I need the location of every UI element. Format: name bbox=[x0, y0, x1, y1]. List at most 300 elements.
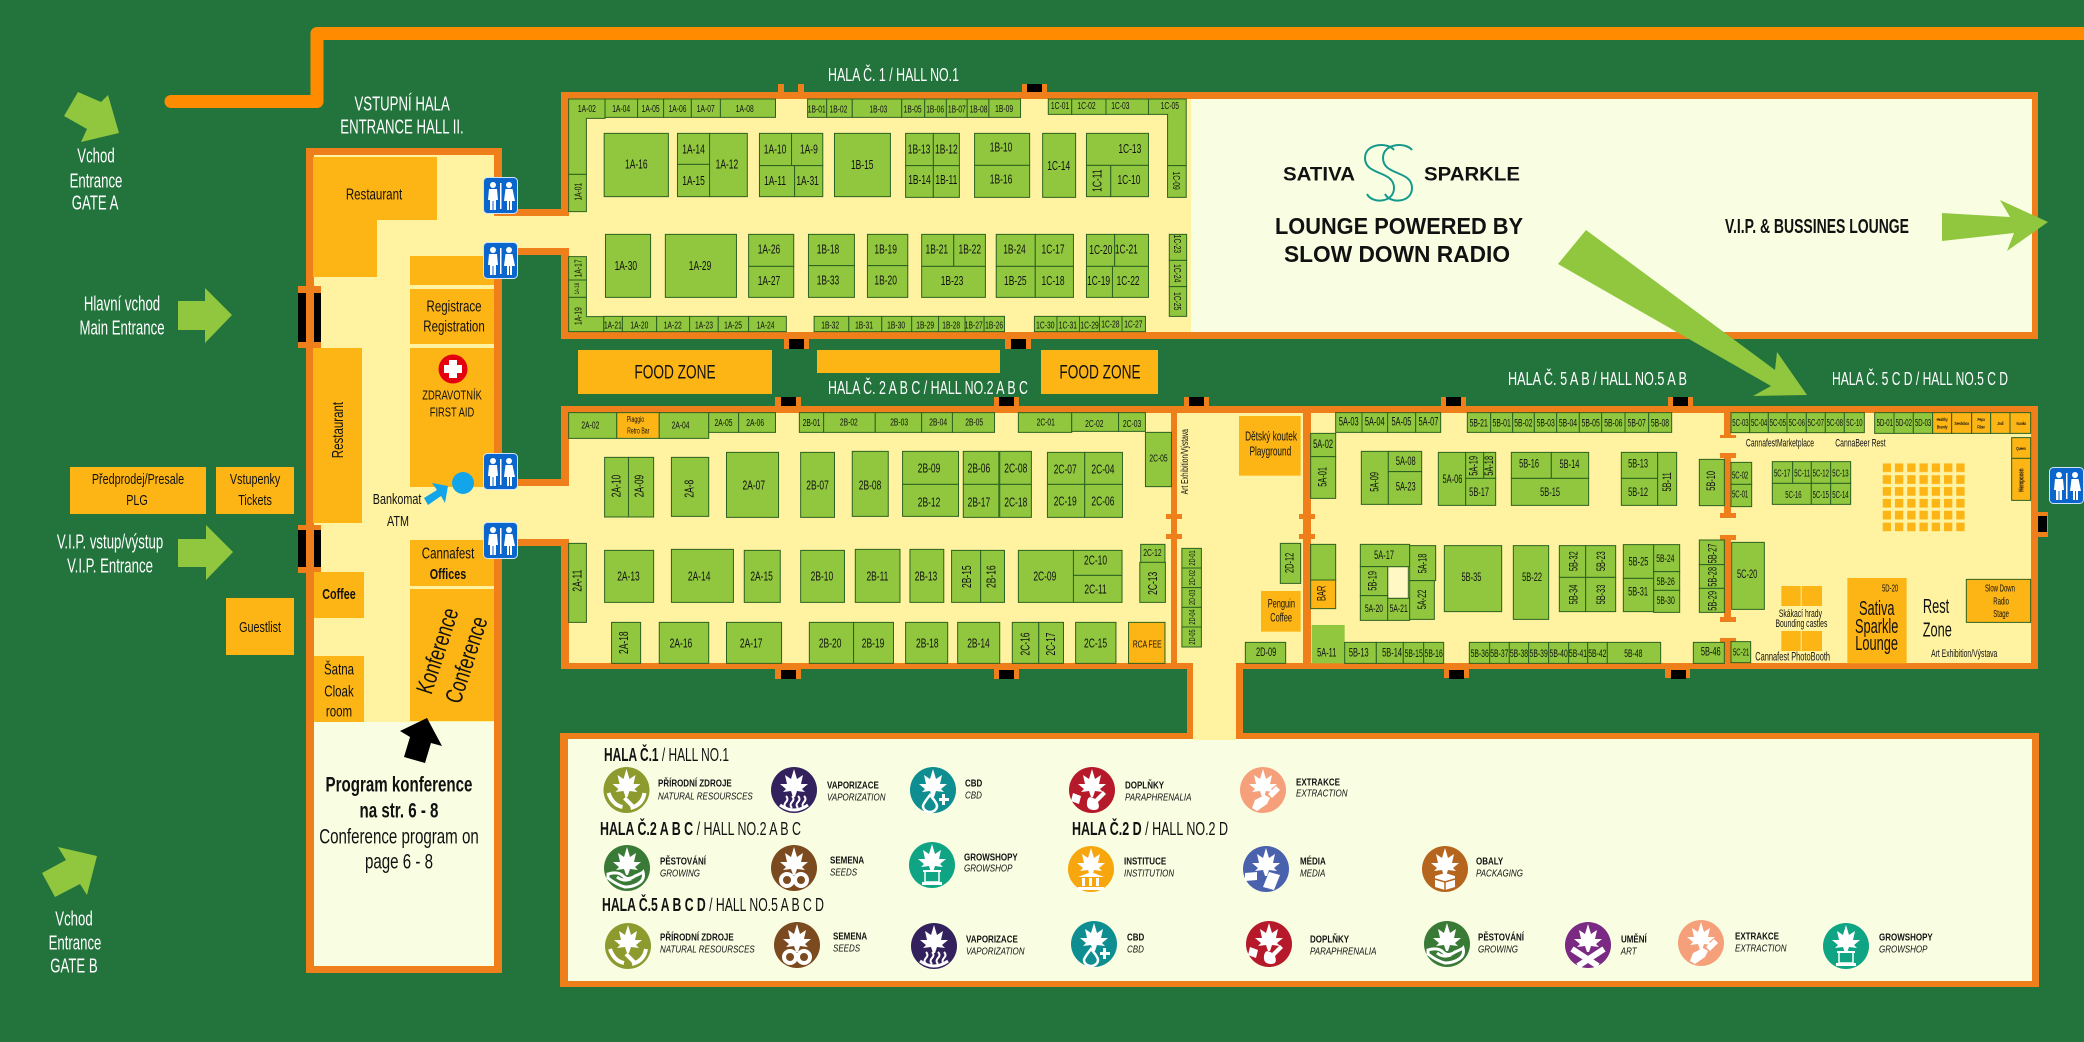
ATM: Bankomat bbox=[373, 490, 422, 508]
legend item: media bbox=[1243, 846, 1326, 892]
bounding castles and photobooth: Skákací hrady bbox=[1779, 607, 1822, 619]
hall 5 bottom row: 5A-11 bbox=[1317, 647, 1337, 660]
heading: hall 2: HALA Č. 2 A B C / HALL NO.2 A B C bbox=[828, 377, 1028, 398]
tickets box bbox=[216, 467, 294, 514]
hall 5 row 1: 5A-06 bbox=[1443, 473, 1463, 487]
hall 2 row 1: 2C-07 bbox=[1054, 463, 1077, 477]
hall 5 C D stalls bbox=[1693, 413, 2031, 664]
hall 1 top row C: 1C-09 bbox=[1170, 171, 1182, 190]
hall 5 row 1: 5A-19 bbox=[1468, 456, 1481, 476]
legend item: paraphrenalia: PARAPHRENALIA bbox=[1125, 791, 1191, 803]
legend item: extraction hall 5: EXTRAKCE bbox=[1735, 930, 1779, 942]
legend item: paraphrenalia hall 5: DOPLŇKY bbox=[1310, 932, 1349, 945]
hall 2 top row A: 2A-02 bbox=[581, 419, 599, 431]
hall 2 row 2: 2A-14 bbox=[688, 570, 710, 584]
ATM bbox=[373, 472, 474, 530]
hall 5 row 1: 5A-18 bbox=[1483, 456, 1497, 476]
area labels: CannafestMarketplace bbox=[1746, 437, 1814, 449]
hall 5 row 2: 5B-22 bbox=[1522, 571, 1542, 585]
legend item: extraction hall 5 bbox=[1678, 920, 1787, 966]
hall 5 row 2: 5A-22 bbox=[1416, 589, 1430, 609]
legend item: media: MÉDIA bbox=[1300, 855, 1326, 867]
hall 5D top stalls: 5D-02 bbox=[1896, 418, 1912, 428]
hall 1 top row B: 1B-09 bbox=[995, 102, 1013, 114]
hall 5B top stalls: 5B-04 bbox=[1559, 417, 1577, 429]
hall 5 row 2: 5B-24 bbox=[1656, 552, 1674, 564]
hall 2 stalls bbox=[569, 413, 1201, 663]
hall 5 row 2: 5B-30 bbox=[1657, 594, 1675, 606]
hall 2 row 2: 2A-11 bbox=[571, 570, 585, 592]
hall 1 middle block row 1: 1B-12 bbox=[935, 143, 958, 157]
hall 1 top row A: 1A-02 bbox=[578, 102, 596, 114]
legend item: natural resources hall 5: NATURAL RESOURSCES bbox=[660, 943, 755, 955]
hall 1 middle block row 1: 1C-13 bbox=[1118, 142, 1141, 156]
legend item: art hall 5: UMĚNÍ bbox=[1621, 932, 1647, 945]
hall 5A top stalls: 5A-05 bbox=[1392, 416, 1412, 429]
bar bbox=[1311, 544, 1336, 609]
hall 1 bottom row: 1C-31 bbox=[1059, 319, 1077, 331]
legend heading: hall 2 D: HALA Č.2 D / HALL NO.2 D bbox=[1072, 818, 1228, 839]
legend item: paraphrenalia hall 5: PARAPHRENALIA bbox=[1310, 945, 1376, 957]
hall 2 row 2: 2B-11 bbox=[866, 570, 888, 584]
cloakroom bbox=[314, 656, 364, 722]
heading: entrance hall bbox=[340, 93, 464, 138]
legend item: natural resources hall 5 bbox=[605, 923, 755, 969]
hall 5C top stalls: 5C-04 bbox=[1751, 418, 1768, 428]
sativa sparkle lounge bbox=[1847, 578, 1907, 663]
hall 1 top row B: 1B-01 bbox=[808, 103, 826, 115]
legend item: CBD hall 5 bbox=[1071, 921, 1145, 967]
hall 5 row 1: 5B-13 bbox=[1628, 458, 1648, 471]
hall 5A top stalls bbox=[1311, 413, 1441, 498]
first aid: ZDRAVOTNÍK bbox=[422, 388, 482, 403]
hall 1 middle block row 2: 1B-23 bbox=[941, 275, 963, 289]
legend item: paraphrenalia bbox=[1069, 767, 1191, 813]
hall 1 bottom row: 1A-20 bbox=[630, 319, 648, 331]
hall 1 top row A bbox=[569, 99, 775, 212]
legend heading: hall 5: HALA Č.5 A B C D / HALL NO.5 A B C D bbox=[602, 894, 824, 915]
cloakroom: room bbox=[326, 702, 352, 720]
icon: restrooms upper 2 bbox=[484, 242, 518, 278]
hall 1 middle block row 1: 1B-13 bbox=[908, 143, 930, 157]
hall 5 bottom row: 5B-37 bbox=[1490, 647, 1508, 659]
arrow: main entrance bbox=[178, 288, 232, 343]
hall 1 bottom row bbox=[569, 257, 1145, 332]
hall 2 row 1 bbox=[605, 451, 1122, 517]
hall 2 row 1: 2B-17 bbox=[968, 496, 990, 510]
conference program note: na str. 6 - 8 bbox=[360, 798, 438, 822]
slow down radio stage: Slow Down bbox=[1985, 583, 2015, 594]
hall 5C top stalls: 5C-10 bbox=[1846, 418, 1863, 428]
legend item: art hall 5 bbox=[1565, 922, 1647, 968]
hall 1 top row B bbox=[808, 99, 1021, 117]
hall 1 middle block row 2: 1C-24 bbox=[1172, 264, 1184, 283]
hall 5D top stalls: 5D-01 bbox=[1877, 418, 1893, 428]
food zone left bbox=[578, 350, 772, 394]
hall 5 row 1: 5B-14 bbox=[1560, 458, 1580, 472]
legend item: seeds: SEEDS bbox=[830, 866, 857, 878]
hall 1 bottom row: 1A-25 bbox=[724, 319, 742, 331]
legend item: extraction: EXTRAKCE bbox=[1296, 776, 1340, 788]
panel: hall 2 and 5 floor bbox=[561, 406, 2038, 669]
rest zone bbox=[1923, 594, 1952, 641]
hall 5 bottom row: 5B-40 bbox=[1550, 647, 1568, 659]
hall 2D extras: Playground bbox=[1249, 445, 1291, 459]
hall 5D top stalls: Brandy bbox=[1937, 424, 1948, 430]
hall 2D extras: 2D-12 bbox=[1284, 552, 1297, 573]
slow down radio stage: Stage bbox=[1993, 609, 2009, 619]
cannafest offices bbox=[410, 540, 494, 586]
hall 2 row 3: 2C-17 bbox=[1044, 632, 1058, 655]
legend item: natural resources: NATURAL RESOURSCES bbox=[658, 790, 753, 802]
legend item: seeds: SEMENA bbox=[830, 854, 865, 866]
VIP lounge label: V.I.P. & BUSSINES LOUNGE bbox=[1725, 216, 1909, 238]
hall 2 top row B and C: 2C-01 bbox=[1037, 416, 1055, 428]
gate A label: Vchod bbox=[77, 145, 115, 167]
hall 5C block: 5C-11 bbox=[1794, 468, 1810, 479]
legend item: growing hall 5 bbox=[1424, 921, 1524, 967]
hall 5 C lower stalls: 5B-27 bbox=[1707, 543, 1720, 563]
slow down radio stage: Radio bbox=[1993, 596, 2009, 607]
legend item: packaging bbox=[1422, 846, 1523, 892]
conference program note: Conference program on bbox=[319, 824, 479, 848]
hall 1 middle block row 2: 1C-22 bbox=[1117, 275, 1140, 289]
hall 1 middle block row 2: 1B-20 bbox=[874, 274, 897, 288]
legend heading: hall 2 ABC: HALA Č.2 A B C / HALL NO.2 A B C bbox=[600, 818, 801, 839]
area labels bbox=[1746, 437, 1886, 449]
presale box: Předprodej/Presale bbox=[92, 470, 184, 488]
hall 1 bottom row: 1A-19 bbox=[572, 307, 584, 325]
hall 5 C lower stalls: 5C-21 bbox=[1733, 647, 1750, 658]
hall 5C block: 5C-12 bbox=[1813, 468, 1829, 479]
hall 2 row 3: 2A-17 bbox=[740, 637, 762, 651]
legend item: growshop: GROWSHOP bbox=[964, 862, 1012, 874]
hall 2 row 2: 2C-12 bbox=[1143, 547, 1162, 559]
hall 2 row 3: 2C-16 bbox=[1019, 632, 1033, 655]
arrow: VIP entrance bbox=[178, 525, 233, 580]
doors bbox=[298, 84, 2048, 679]
legend item: seeds hall 5: SEMENA bbox=[833, 930, 868, 942]
sativa sparkle logo and lounge title: SATIVA bbox=[1283, 164, 1355, 186]
legend item: growing: GROWING bbox=[660, 867, 700, 879]
tickets box: Tickets bbox=[238, 491, 272, 509]
first aid: FIRST AID bbox=[430, 406, 474, 420]
presale box bbox=[70, 467, 206, 514]
hall 5 row 2: 5B-34 bbox=[1568, 584, 1581, 604]
hall 5C block: 5C-15 bbox=[1813, 490, 1829, 500]
hall 2 top row B and C: 2C-05 bbox=[1149, 452, 1168, 464]
arrow: to conference bbox=[400, 718, 442, 763]
legend item: growshop hall 5 bbox=[1823, 923, 1933, 969]
hall 5C block: 5C-17 bbox=[1774, 468, 1791, 479]
hall 1 bottom row: 1B-26 bbox=[985, 319, 1003, 331]
hall 5B top stalls: 5B-02 bbox=[1514, 417, 1532, 429]
heading: entrance hall: VSTUPNÍ HALA bbox=[354, 93, 450, 115]
main entrance label bbox=[79, 293, 165, 339]
hall 1 middle block row 2: 1A-26 bbox=[758, 243, 780, 257]
icon: restrooms lower 2 bbox=[484, 522, 518, 558]
hall 5 row 2 bbox=[1360, 544, 1680, 620]
panel: entrance hall floor bbox=[306, 148, 502, 973]
hall 1 bottom row: 1A-17 bbox=[572, 259, 584, 277]
hall 1 bottom row: 1C-29 bbox=[1080, 319, 1099, 331]
hall 5C block: 5C-01 bbox=[1732, 489, 1749, 500]
hall 1 top row C: 1C-01 bbox=[1051, 100, 1069, 112]
hall 5D top stalls: Fiber bbox=[1977, 424, 1985, 430]
hall 2 row 3: RCA FEE bbox=[1133, 638, 1162, 650]
hall 5D top stalls: Seedsbox bbox=[1955, 420, 1970, 426]
legend item: extraction hall 5: EXTRACTION bbox=[1735, 942, 1787, 954]
food zone right bbox=[1041, 350, 1158, 394]
hall 1 middle block row 2: 1B-21 bbox=[926, 243, 948, 257]
bounding castles and photobooth: Bounding castles bbox=[1775, 617, 1828, 629]
hall 5C top stalls: 5C-05 bbox=[1770, 418, 1786, 428]
hall 1 top row A: 1A-07 bbox=[697, 102, 715, 114]
first aid bbox=[410, 348, 494, 487]
legend item: natural resources hall 5: PŘÍRODNÍ ZDROJE bbox=[660, 930, 734, 943]
VIP entrance label bbox=[57, 531, 163, 577]
hall 2 row 1: 2B-09 bbox=[918, 462, 940, 476]
hall 1 top row B: 1B-02 bbox=[829, 103, 848, 115]
bar: BAR bbox=[1316, 586, 1329, 601]
hall 5 bottom row: 5B-41 bbox=[1569, 647, 1587, 659]
sativa sparkle logo and lounge title bbox=[1275, 145, 1523, 267]
hall 5 row 1: 5A-09 bbox=[1369, 472, 1382, 492]
hall 5 bottom row: 5B-39 bbox=[1530, 647, 1548, 659]
bounding castles and photobooth bbox=[1755, 586, 1830, 664]
hall 1 top row B: 1B-05 bbox=[904, 103, 922, 115]
VIP entrance label: V.I.P. Entrance bbox=[67, 555, 153, 577]
hall 1 middle block row 1: 1B-16 bbox=[990, 173, 1012, 187]
hall 1 middle block row 2: 1B-22 bbox=[959, 243, 981, 257]
hall 2 row 1: 2B-06 bbox=[968, 462, 990, 476]
arrow: gate A bbox=[64, 92, 119, 142]
hall 2 top row A bbox=[569, 413, 775, 438]
hall 5 row 1: 5B-17 bbox=[1469, 486, 1489, 500]
hall 1 middle block row 2: 1C-17 bbox=[1042, 243, 1065, 257]
hall 5 C lower stalls: 5B-28 bbox=[1707, 567, 1720, 587]
hall 2 top row B and C: 2B-03 bbox=[890, 416, 908, 428]
food zones bbox=[578, 350, 1158, 394]
hall 2 row 2: 2C-10 bbox=[1084, 554, 1107, 568]
hall 1 middle block row 2: 1C-18 bbox=[1042, 275, 1065, 289]
hall 2 row 3: 2B-19 bbox=[862, 637, 884, 651]
legend item: media: MEDIA bbox=[1300, 867, 1325, 879]
hall 1 top row C: 1C-03 bbox=[1111, 100, 1130, 112]
hall 2 top row B and C: 2B-01 bbox=[803, 417, 821, 429]
legend item: CBD: CBD bbox=[965, 789, 982, 801]
hall 1 middle block row 1: 1A-14 bbox=[682, 143, 705, 157]
hall 2D stalls column: 2D-02 bbox=[1187, 570, 1197, 585]
legend item: packaging: PACKAGING bbox=[1476, 867, 1523, 879]
conference room bbox=[410, 589, 494, 721]
hall 1 top row A: 1A-06 bbox=[669, 102, 687, 114]
hall 2D stalls column: 2D-05 bbox=[1187, 629, 1197, 645]
hall 1 middle block row 2 bbox=[605, 234, 1187, 316]
cannafest offices: Offices bbox=[430, 565, 466, 583]
legend item: vaporization hall 5 bbox=[911, 923, 1025, 969]
hall 5D top stalls: Ivanko bbox=[2017, 420, 2027, 426]
hall 5 row 2: 5A-21 bbox=[1390, 602, 1408, 614]
sativa sparkle lounge: 5D-20 bbox=[1882, 583, 1899, 594]
legend item: paraphrenalia hall 5 bbox=[1246, 921, 1376, 967]
hall 2 row 1: 2B-08 bbox=[859, 479, 881, 493]
hall 1 bottom row: 1C-28 bbox=[1101, 318, 1120, 330]
hall 5 bottom row: 5B-15 bbox=[1405, 647, 1423, 659]
cloakroom: Šatna bbox=[324, 660, 354, 678]
coffee: Coffee bbox=[322, 585, 356, 603]
legend item: extraction: EXTRACTION bbox=[1296, 787, 1348, 799]
legend item: natural resources: PŘÍRODNÍ ZDROJE bbox=[658, 776, 732, 789]
hall 1 middle block row 2: 1C-25 bbox=[1172, 292, 1184, 311]
heading: hall 1: HALA Č. 1 / HALL NO.1 bbox=[828, 64, 959, 85]
heading: entrance hall: ENTRANCE HALL II. bbox=[340, 116, 464, 138]
hall 1 middle block row 2: 1B-25 bbox=[1004, 275, 1027, 289]
hall 2D extras: Penguin bbox=[1268, 598, 1295, 611]
hall 5 C lower stalls: 5B-46 bbox=[1701, 646, 1721, 659]
hall 1 top row A: 1A-08 bbox=[736, 102, 754, 114]
gate B label bbox=[49, 908, 101, 977]
panel: hall 1 floor bbox=[561, 92, 2038, 339]
hall 5C top stalls: 5C-07 bbox=[1808, 418, 1824, 428]
gate A label: GATE A bbox=[72, 192, 119, 214]
hall 2 row 3 bbox=[612, 622, 1165, 663]
hall 2D extras bbox=[1239, 416, 1301, 663]
hall 1 top row A: 1A-05 bbox=[642, 102, 660, 114]
rest zone: Zone bbox=[1923, 617, 1952, 641]
hall 2 row 2 bbox=[569, 543, 1165, 622]
hall 2 row 3: 2A-16 bbox=[670, 637, 692, 651]
hall 1 bottom row: 1B-31 bbox=[855, 319, 873, 331]
arrow: gate B bbox=[42, 847, 97, 897]
hall 5C top stalls: 5C-03 bbox=[1732, 418, 1749, 428]
corridors between entrance hall and halls bbox=[490, 209, 572, 546]
hall 2 row 1: 2C-06 bbox=[1091, 495, 1114, 509]
hall 5C block: 5C-02 bbox=[1732, 470, 1749, 481]
coffee bbox=[314, 572, 364, 618]
legend item: growshop bbox=[909, 842, 1018, 888]
tickets box: Vstupenky bbox=[230, 470, 281, 488]
hall 5 row 2: 5B-26 bbox=[1657, 575, 1675, 587]
hall 2 top row B and C bbox=[799, 413, 1171, 487]
legend item: art hall 5: ART bbox=[1620, 945, 1638, 957]
hall 5 row 1: 5B-11 bbox=[1662, 472, 1675, 491]
legend item: vaporization bbox=[771, 767, 886, 813]
hall 5A top stalls: 5A-07 bbox=[1419, 416, 1439, 429]
hall 2 row 1: 2B-07 bbox=[806, 479, 829, 493]
hall 5 row 2: 5A-17 bbox=[1374, 549, 1394, 563]
hall 1 middle block row 2: 1B-24 bbox=[1003, 243, 1026, 257]
hall 5D top stalls: Jodi bbox=[1997, 420, 2004, 426]
hall 5 bottom row: 5B-13 bbox=[1349, 647, 1369, 660]
hall 5B top stalls: 5B-03 bbox=[1537, 417, 1555, 429]
hall 1 bottom row: 1C-30 bbox=[1036, 319, 1055, 331]
hall 1 middle block row 2: 1C-20 bbox=[1089, 244, 1112, 258]
hall 1 top row B: 1B-07 bbox=[948, 103, 966, 115]
legend item: CBD hall 5: CBD bbox=[1127, 931, 1145, 943]
bounding castles and photobooth: Cannafest PhotoBooth bbox=[1755, 651, 1830, 664]
gate B label: GATE B bbox=[50, 955, 98, 977]
hall 5 bottom row: 5B-14 bbox=[1382, 647, 1402, 660]
hall 2 row 2: 2B-13 bbox=[915, 570, 937, 584]
hall 2 row 3: 2B-14 bbox=[967, 637, 990, 651]
hall 1 middle block row 1: 1C-10 bbox=[1117, 174, 1140, 188]
hall 1 bottom row: 1A-24 bbox=[757, 319, 775, 331]
hall 5D top stalls: Pepa bbox=[1977, 416, 1985, 422]
panel: legend floor bbox=[560, 660, 2039, 987]
hall 1 middle block row 1: 1A-12 bbox=[716, 158, 738, 172]
hall 5 bottom row: 5B-42 bbox=[1588, 647, 1606, 659]
hall 5B top stalls: 5B-01 bbox=[1493, 417, 1511, 429]
hall 1 top row C bbox=[1048, 99, 1186, 197]
hall 1 middle block row 1: 1A-10 bbox=[764, 143, 786, 157]
hall 1 middle block row 1: 1C-14 bbox=[1047, 160, 1070, 174]
restaurant top: Restaurant bbox=[346, 185, 402, 203]
hall 5C block: 5B-10 bbox=[1705, 471, 1719, 491]
hall 2 row 3: 2B-18 bbox=[916, 637, 939, 651]
cannafest offices: Cannafest bbox=[422, 544, 474, 562]
legend item: vaporization: VAPORIZATION bbox=[827, 791, 886, 803]
sativa sparkle logo and lounge title: SPARKLE bbox=[1424, 164, 1520, 186]
hall 5 row 2: 5B-19 bbox=[1367, 571, 1380, 591]
hall 1 middle block row 1: 1B-14 bbox=[908, 174, 931, 188]
hall 5 row 1: 5A-23 bbox=[1396, 481, 1416, 494]
hall 1 bottom row: 1B-30 bbox=[887, 319, 905, 331]
hall 5C top stalls: 5C-06 bbox=[1789, 418, 1805, 428]
hall 1 top row C: 1C-02 bbox=[1077, 100, 1096, 112]
registration: Registrace bbox=[427, 297, 482, 315]
hall 1 top row A: 1A-04 bbox=[612, 102, 630, 114]
legend heading: hall 1: HALA Č.1 / HALL NO.1 bbox=[604, 744, 729, 765]
hall 2 row 1: 2A-10 bbox=[610, 475, 624, 497]
hall 2D stalls column: 2D-04 bbox=[1187, 609, 1197, 625]
entrance hall rooms bbox=[313, 157, 494, 873]
hall 2 top row A: 2A-04 bbox=[672, 419, 690, 431]
icon: restrooms upper 1 bbox=[484, 178, 518, 214]
conference program note: Program konference bbox=[326, 772, 472, 796]
hall 2 row 2: 2C-11 bbox=[1084, 583, 1107, 597]
hall headings bbox=[828, 64, 2008, 398]
slow down radio stage bbox=[1966, 579, 2031, 622]
hall 1 middle block row 1: 1A-9 bbox=[800, 143, 818, 157]
hall 5 row 2: 5A-18 bbox=[1417, 553, 1430, 573]
hall 5D top stalls bbox=[1875, 413, 2031, 500]
hall 2 row 1: 2A-8 bbox=[683, 480, 697, 498]
cloakroom: Cloak bbox=[324, 682, 354, 700]
legend item: growshop hall 5: GROWSHOP bbox=[1879, 943, 1927, 955]
hall 5 C lower stalls: 5B-29 bbox=[1707, 591, 1720, 611]
gate B label: Vchod bbox=[55, 908, 93, 930]
main entrance label: Main Entrance bbox=[79, 317, 165, 339]
hall 5A top stalls: 5A-02 bbox=[1313, 438, 1333, 452]
hall 5 row 1: 5B-16 bbox=[1519, 458, 1539, 471]
restaurant lower: Restaurant bbox=[328, 402, 346, 458]
legend item: CBD hall 5: CBD bbox=[1127, 943, 1144, 955]
legend item: vaporization: VAPORIZACE bbox=[827, 779, 879, 791]
gate A label bbox=[70, 145, 122, 214]
legend item: CBD bbox=[910, 767, 983, 813]
hall 2 row 3: 2B-20 bbox=[819, 637, 841, 651]
hall 1 bottom row: 1A-23 bbox=[695, 319, 713, 331]
hall 5D top stalls: 5D-03 bbox=[1915, 418, 1932, 428]
hall 5B top stalls bbox=[1467, 413, 1672, 432]
hall 1 middle block row 2: 1C-23 bbox=[1172, 235, 1184, 253]
conference room: Conference bbox=[441, 613, 493, 707]
hall 5 row 2: 5B-23 bbox=[1595, 551, 1609, 571]
gate A label: Entrance bbox=[70, 170, 122, 192]
hall 5B top stalls: 5B-06 bbox=[1604, 417, 1622, 429]
hall 1 middle block row 1: 1B-10 bbox=[990, 141, 1012, 155]
